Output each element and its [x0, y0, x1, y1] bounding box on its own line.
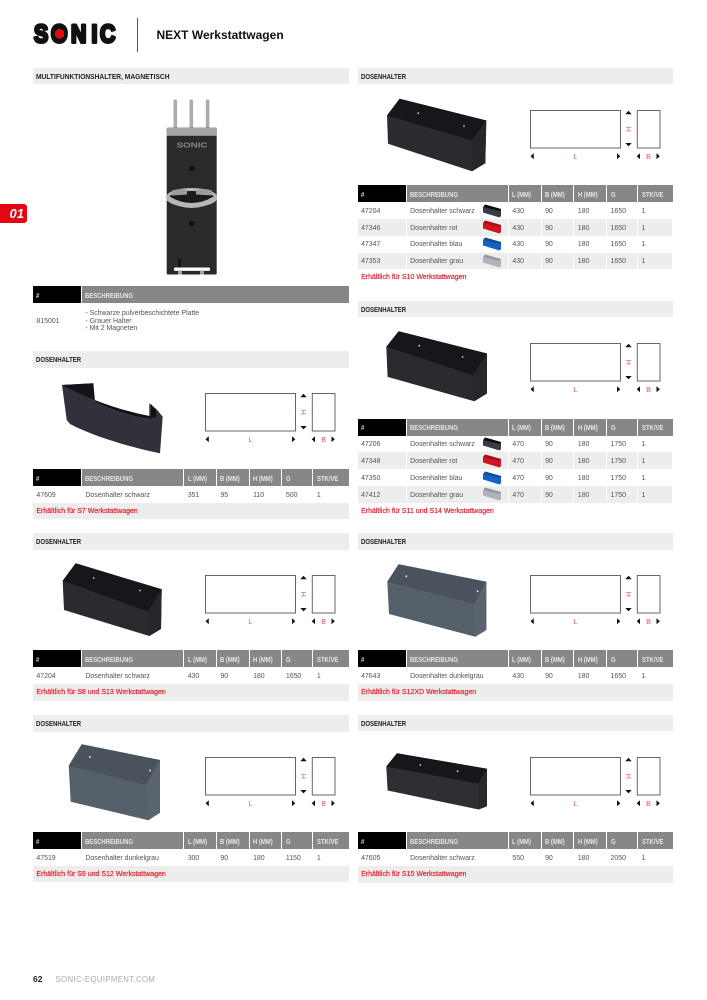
table row: 47348 red: 1: [642, 458, 645, 465]
dimension diagram: L: [249, 619, 253, 626]
section heading: [358, 301, 673, 317]
table header: [33, 469, 348, 486]
dimension diagram: H: [624, 126, 631, 131]
table header: #: [36, 291, 40, 300]
table header: B (MM): [220, 837, 240, 846]
table row: 47519: 1150: [286, 855, 301, 862]
table header: [358, 185, 673, 202]
table header: [358, 419, 673, 436]
dimension diagram: B: [646, 387, 651, 394]
title: NEXT Werkstattwagen: [156, 28, 284, 42]
table row: 47605: 180: [578, 855, 589, 862]
table header: STK/VE: [317, 655, 338, 664]
availability note: Erhältlich für S7 Werkstattwagen: [36, 508, 138, 515]
table row: 47346 red: 1: [642, 225, 645, 232]
website: SONIC-EQUIPMENT.COM: [56, 974, 155, 984]
table header: H (MM): [578, 190, 597, 199]
table header: BESCHREIBUNG: [410, 190, 458, 199]
table header: BESCHREIBUNG: [85, 474, 133, 483]
table header: B (MM): [220, 474, 240, 483]
table row: 47412 grey: [358, 486, 672, 503]
section heading: DOSENHALTER: [36, 355, 82, 364]
panel: dosenhalter 470 mm set: [358, 301, 673, 515]
table row: 47353 grey: [358, 253, 672, 269]
table row: 47204: Dosenhalter schwarz: [85, 673, 150, 680]
product image: black bin: [62, 563, 162, 636]
panel: dosenhalter 47643: [358, 533, 673, 701]
table header: STK/VE: [642, 423, 663, 432]
table row: 47204 black: 47204: [361, 208, 380, 215]
table row: 47519: 1: [317, 855, 321, 862]
table row: 47348 red: 470: [512, 458, 524, 465]
table header: H (MM): [253, 837, 273, 846]
dimension diagram: L: [573, 619, 577, 626]
table header: B (MM): [220, 655, 240, 664]
table row: 47204: 90: [220, 673, 228, 680]
table row: 47204: 1650: [286, 673, 301, 680]
section heading: [358, 714, 673, 731]
table: [358, 832, 673, 883]
table row: 815001: 815001: [36, 318, 60, 324]
dimension diagram: H: [624, 592, 631, 597]
availability note: [33, 684, 348, 701]
table row: 47605: 1: [642, 855, 645, 862]
availability note: Erhältlich für S8 und S13 Werkstattwagen: [36, 689, 166, 696]
product image: dark grey bin: [68, 744, 160, 820]
table header: #: [36, 474, 40, 483]
section heading: [33, 68, 348, 84]
table row: 47353 grey: 47353: [361, 258, 380, 265]
table row: 47350 blue: 47350: [361, 475, 380, 482]
product image: black bin: [387, 98, 486, 172]
table row: 47609: 1: [317, 492, 321, 499]
product image: dark grey bin: [387, 564, 486, 637]
table row: 47206 black: 90: [545, 441, 553, 448]
section heading: MULTIFUNKTIONSHALTER, MAGNETISCH: [36, 72, 170, 80]
table row: 47605: 47605: [361, 855, 380, 862]
table header: STK/VE: [317, 837, 338, 846]
section heading: DOSENHALTER: [361, 72, 406, 80]
table row: 47348 red: 47348: [361, 458, 380, 465]
availability note: [33, 503, 348, 519]
table row: 47353 grey: 430: [512, 258, 524, 265]
table: [358, 185, 673, 281]
table row: 47412 grey: Dosenhalter grau: [410, 492, 463, 499]
table row: 47609: 95: [220, 492, 228, 499]
dimension diagram: B: [321, 801, 326, 808]
panel: multifunktionshalter: [33, 68, 349, 332]
dimension diagram: H: [299, 774, 306, 779]
table row: 47346 red: 1650: [611, 225, 626, 232]
table row: 47643: 47643: [361, 673, 380, 680]
table header: B (MM): [545, 423, 565, 432]
table row: 47348 red: 90: [545, 458, 553, 465]
table header: STK/VE: [642, 837, 663, 846]
section heading: DOSENHALTER: [361, 305, 406, 314]
availability note: [358, 866, 673, 883]
dimension diagram: B: [646, 619, 651, 626]
table header: H (MM): [578, 423, 597, 432]
table row: 47204 black: 430: [512, 208, 524, 215]
table row: 47353 grey: 90: [545, 258, 553, 265]
section heading: [33, 715, 348, 732]
table header: #: [36, 655, 40, 664]
table header: #: [361, 190, 364, 199]
table row: 47347 blue: 1: [642, 241, 645, 248]
section heading: [358, 68, 673, 84]
table header: L (MM): [512, 190, 531, 199]
table row: 47350 blue: [361, 472, 646, 484]
dimension diagram: [205, 393, 336, 444]
table row: 47609: 110: [253, 492, 264, 499]
dimension diagram: H: [299, 592, 306, 597]
table row: 47350 blue: 90: [545, 475, 553, 482]
table row: 47347 blue: 1650: [611, 241, 626, 248]
section heading: [358, 533, 673, 550]
table header: G: [611, 837, 615, 846]
availability note: Erhältlich für S9 und S12 Werkstattwagen: [36, 871, 166, 878]
table: [33, 650, 349, 701]
table header: G: [611, 423, 615, 432]
table row: 47204: 180: [253, 673, 265, 680]
table row: 47350 blue: 1: [642, 475, 645, 482]
dimension diagram: B: [646, 153, 651, 160]
table header: H (MM): [578, 837, 597, 846]
table header: BESCHREIBUNG: [85, 837, 133, 846]
table row: 47346 red: 180: [578, 225, 589, 232]
section heading: [33, 351, 348, 368]
table header: G: [286, 837, 290, 846]
table row: 47206 black: Dosenhalter schwarz: [410, 441, 475, 448]
table row: 47609: 47609: [36, 492, 56, 499]
section heading: DOSENHALTER: [361, 537, 406, 546]
dimension diagram: L: [249, 801, 253, 808]
table row: 47519: [36, 854, 321, 862]
page number: 62: [33, 974, 42, 984]
table header: STK/VE: [317, 474, 338, 483]
table header: L (MM): [512, 837, 531, 846]
table header: BESCHREIBUNG: [410, 655, 458, 664]
table row: 47605: Dosenhalter schwarz: [410, 855, 475, 862]
table row: 47519: 90: [220, 855, 228, 862]
table row: 47519: 300: [188, 855, 199, 862]
product image: curved holder: [62, 383, 163, 454]
table row: 47204 black: [361, 204, 646, 218]
table row: 47206 black: 180: [578, 441, 589, 448]
table header: #: [361, 837, 364, 846]
table row: 47204: 47204: [36, 673, 56, 680]
table header: G: [286, 655, 290, 664]
table row: 47204: [36, 672, 321, 680]
table: [358, 419, 673, 515]
availability note: Erhältlich für S12XD Werkstattwagen: [361, 689, 476, 696]
dimension diagram: [205, 757, 336, 808]
table row: 47412 grey: 47412: [361, 492, 380, 499]
table row: 47347 blue: 180: [578, 241, 589, 248]
table row: 47206 black: 1: [642, 441, 645, 448]
table row: 47353 grey: 1: [642, 258, 645, 265]
table header: #: [361, 423, 364, 432]
table row: 47348 red: 180: [578, 458, 589, 465]
table row: 47350 blue: Dosenhalter blau: [410, 475, 462, 482]
panel: dosenhalter 47605: [358, 714, 673, 884]
dimension diagram: L: [249, 437, 253, 444]
dimension diagram: B: [321, 619, 326, 626]
panel: dosenhalter 47609: [33, 351, 349, 519]
table header: G: [286, 474, 290, 483]
table row: 47643: [358, 667, 673, 684]
table header: [33, 286, 348, 303]
table row: 47412 grey: 1750: [611, 492, 626, 499]
section heading: DOSENHALTER: [361, 718, 406, 728]
table row: 47412 grey: 1: [642, 492, 645, 499]
table header: BESCHREIBUNG: [410, 423, 458, 432]
table row: 815001: - Grauer Halter: [85, 318, 131, 324]
dimension diagram: H: [624, 773, 631, 778]
table row: 47204 black: 180: [578, 208, 589, 215]
availability note: [33, 866, 348, 882]
table row: 47609: 500: [286, 492, 297, 499]
table row: 47204 black: 1: [642, 208, 645, 215]
dimension diagram: B: [646, 800, 651, 807]
table row: 47643: Dosenhalter dunkelgrau: [410, 673, 484, 680]
table: [358, 650, 673, 701]
table row: 47605: [358, 849, 673, 866]
table row: 47206 black: 1750: [611, 441, 626, 448]
table row: 47204 black: 1650: [611, 208, 626, 215]
dimension diagram: [528, 752, 668, 812]
table header: STK/VE: [642, 190, 663, 199]
table row: 47605: 2050: [611, 855, 626, 862]
table row: 47348 red: 1750: [611, 458, 626, 465]
table header: B (MM): [545, 837, 565, 846]
chapter tab: 01: [10, 206, 24, 221]
table row: 47605: 550: [512, 855, 524, 862]
table row: 47204: 1: [317, 673, 321, 680]
table header: #: [36, 837, 40, 846]
table row: 47609: [36, 492, 321, 499]
table row: 47348 red: Dosenhalter rot: [410, 458, 457, 465]
table row: 47350 blue: 470: [512, 475, 524, 482]
table header: L (MM): [512, 655, 531, 664]
dimension diagram: [530, 343, 660, 394]
dimension diagram: L: [573, 153, 577, 160]
table row: 47346 red: [358, 219, 672, 236]
table row: 47643: 430: [512, 673, 524, 680]
table row: 47412 grey: 90: [545, 492, 553, 499]
product image: magnetic holder: [166, 100, 218, 274]
table row: 47519: 180: [253, 855, 265, 862]
table row: 47204: 430: [188, 673, 199, 680]
table header: #: [361, 655, 364, 664]
table row: 47519: Dosenhalter dunkelgrau: [85, 855, 159, 862]
table header: B (MM): [545, 655, 565, 664]
availability note: Erhältlich für S15 Werkstattwagen: [361, 871, 466, 878]
dimension diagram: L: [573, 387, 577, 394]
table row: 47347 blue: [361, 238, 646, 250]
table row: 47412 grey: 180: [578, 492, 589, 499]
dimension diagram: [530, 575, 660, 626]
table row: 47347 blue: 90: [545, 241, 553, 248]
table header: [33, 650, 348, 667]
chapter tab: [0, 204, 27, 223]
table row: 47609: Dosenhalter schwarz: [85, 492, 150, 499]
table row: 47346 red: Dosenhalter rot: [410, 225, 457, 232]
table header: BESCHREIBUNG: [410, 837, 458, 846]
table header: B (MM): [545, 190, 565, 199]
table row: 47412 grey: 470: [512, 492, 524, 499]
panel: dosenhalter 47519: [33, 715, 349, 882]
table row: 47643: 1: [642, 673, 645, 680]
table header: BESCHREIBUNG: [85, 655, 133, 664]
table row: 47347 blue: Dosenhalter blau: [410, 241, 462, 248]
table header: [358, 832, 673, 849]
table row: 47353 grey: 1650: [611, 258, 626, 265]
table row: 47643: 180: [578, 673, 589, 680]
availability note: [358, 684, 673, 701]
table row: 47348 red: [358, 452, 672, 469]
table row: 47204 black: 90: [545, 208, 553, 215]
dimension diagram: H: [624, 360, 631, 365]
table header: H (MM): [253, 655, 273, 664]
dimension diagram: [530, 110, 660, 160]
table header: L (MM): [512, 423, 531, 432]
table row: 47346 red: 47346: [361, 225, 380, 232]
availability note: Erhältlich für S10 Werkstattwagen: [361, 274, 466, 281]
table header: H (MM): [578, 655, 597, 664]
table row: 47206 black: [361, 438, 646, 450]
table row: 47350 blue: 180: [578, 475, 589, 482]
logo: SONIC: [34, 20, 116, 48]
table row: 47519: 47519: [36, 855, 56, 862]
dimension diagram: B: [321, 437, 326, 444]
table row: 47353 grey: Dosenhalter grau: [410, 258, 463, 265]
section heading: DOSENHALTER: [36, 719, 82, 728]
table row: 47605: 90: [545, 855, 553, 862]
table header: L (MM): [188, 655, 207, 664]
table row: 47346 red: 90: [545, 225, 553, 232]
table header: H (MM): [253, 474, 273, 483]
table header: [33, 832, 348, 849]
table header: G: [611, 190, 615, 199]
table: [33, 286, 349, 332]
table row: 815001: - Mit 2 Magneten: [85, 325, 137, 332]
product image: black bin: [386, 331, 487, 402]
table row: 47350 blue: 1750: [611, 475, 626, 482]
availability note: Erhältlich für S11 und S14 Werkstattwagen: [361, 508, 494, 515]
dimension diagram: H: [299, 410, 306, 415]
table header: L (MM): [188, 837, 207, 846]
table row: 47353 grey: 180: [578, 258, 589, 265]
product image: long black bin: [383, 750, 488, 812]
table header: STK/VE: [642, 655, 663, 664]
dimension diagram: [205, 575, 336, 626]
table row: 815001: - Schwarze pulverbeschichtete Platte: [85, 310, 199, 317]
table row: 47643: 90: [545, 673, 553, 680]
table row: 47347 blue: 47347: [361, 241, 380, 248]
table row: 815001: [36, 310, 199, 332]
table row: 47206 black: 470: [512, 441, 524, 448]
product image: magnetic holder: SONIC: [176, 140, 208, 149]
table row: 47204 black: Dosenhalter schwarz: [410, 208, 475, 215]
section heading: DOSENHALTER: [36, 537, 82, 546]
table row: 47206 black: 47206: [361, 441, 380, 448]
table: [33, 469, 349, 519]
table row: 47609: 351: [188, 492, 199, 499]
table header: G: [611, 655, 615, 664]
table row: 47346 red: 430: [512, 225, 524, 232]
panel: dosenhalter 430 mm set: [358, 68, 673, 281]
table row: 47643: 1650: [611, 673, 626, 680]
table header: BESCHREIBUNG: [85, 291, 133, 300]
table row: 47347 blue: 430: [512, 241, 524, 248]
table header: L (MM): [188, 474, 207, 483]
panel: dosenhalter 47204 left: [33, 533, 349, 701]
dimension diagram: L: [573, 800, 577, 807]
table header: [358, 650, 673, 667]
section heading: [33, 533, 348, 550]
table: [33, 832, 349, 882]
